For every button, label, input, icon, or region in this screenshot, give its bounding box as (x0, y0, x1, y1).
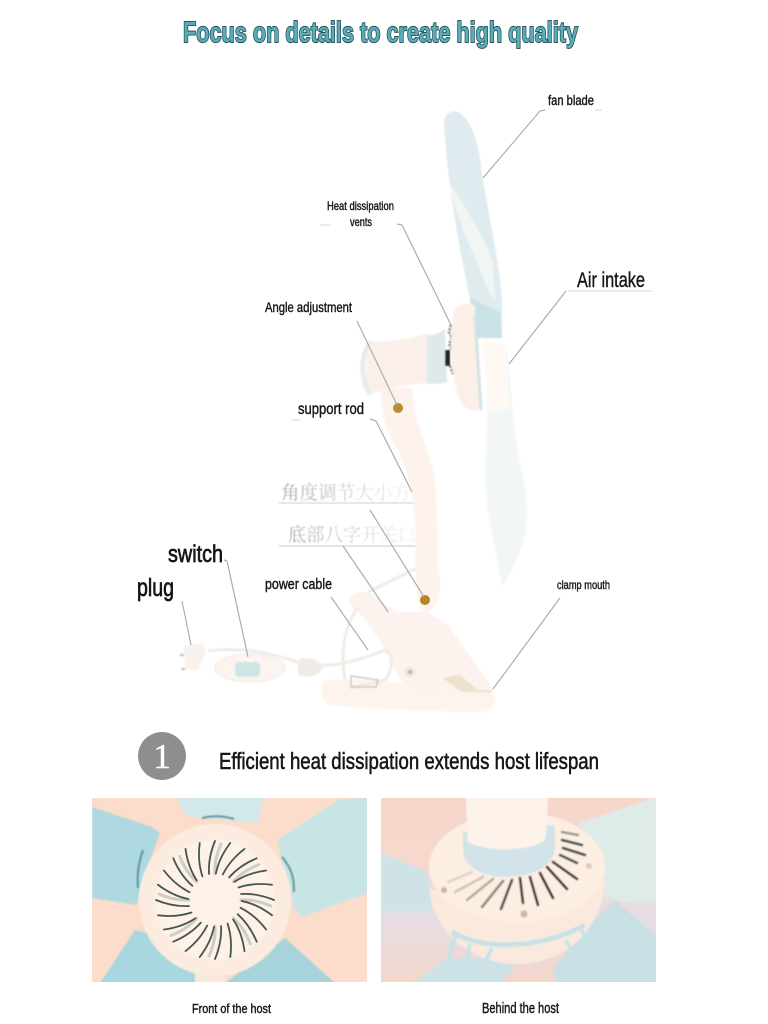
hub top face (429, 816, 606, 890)
label: fan blade (483, 93, 602, 178)
section heading: Efficient heat dissipation extends host lifespan (219, 748, 599, 774)
swirl vents (159, 844, 271, 956)
label: angle adjustment (265, 299, 397, 405)
leader: clamp arm (343, 546, 388, 612)
blue seam (452, 925, 585, 945)
label: plug (137, 574, 191, 645)
hub side wall (430, 880, 605, 964)
infographic canvas (92, 20, 656, 1014)
white lower blade root (482, 338, 509, 410)
black gap (445, 350, 450, 366)
clamp jaw pad (442, 675, 492, 692)
housing end cap (360, 340, 372, 396)
stem (195, 974, 225, 982)
leader: rod lower joint (370, 510, 424, 597)
top blade (177, 797, 263, 823)
label: air intake: Air intake (577, 269, 645, 292)
lower left blade (100, 930, 195, 983)
label: fan blade: fan blade (548, 93, 594, 108)
lower right blade (552, 900, 657, 983)
clamp arm (349, 592, 494, 698)
switch button (235, 662, 260, 677)
support rod (380, 388, 440, 612)
lower fan blade (484, 340, 527, 587)
lower left blade (412, 958, 520, 983)
title: Focus on details to create high quality (183, 17, 578, 49)
photo: front of the host (92, 797, 368, 983)
photo background (381, 798, 656, 982)
label: support rod: support rod (298, 401, 364, 418)
label: heat dissipation vents (320, 199, 451, 325)
vent ridges (449, 325, 453, 374)
label: clamp mouth (493, 578, 610, 689)
plug (184, 643, 206, 670)
left blade (92, 807, 160, 905)
photo background (92, 798, 367, 982)
hub rim (475, 314, 481, 410)
cable knot (298, 658, 323, 677)
right blade (277, 797, 368, 917)
label: air intake (509, 269, 652, 364)
caption: behind the host: Behind the host (482, 1001, 559, 1017)
label: power cable (265, 577, 368, 650)
left blade (381, 853, 432, 912)
label: heat dissipation vents: vents (350, 215, 372, 229)
number badge (138, 732, 186, 780)
label: heat dissipation vents: Heat dissipation (327, 199, 394, 213)
power cable (208, 568, 417, 688)
label: switch (168, 541, 248, 657)
collar (463, 825, 555, 877)
label: switch: switch (168, 541, 223, 568)
ghost caption text behind stand (279, 478, 417, 547)
brass screw: clamp joint (420, 595, 430, 605)
switch body (215, 654, 285, 682)
label: angle adjustment: Angle adjustment (265, 299, 352, 315)
number badge: 1 (153, 737, 171, 776)
photo: behind the host (381, 797, 657, 983)
lower right blade (225, 938, 335, 983)
brass screw: angle joint (393, 403, 403, 413)
clamp pivot (404, 666, 416, 678)
label: plug: plug (137, 574, 174, 602)
upper fan blade (444, 111, 502, 338)
hub face (155, 840, 275, 960)
hub disc (451, 304, 481, 410)
label: clamp mouth: clamp mouth (557, 578, 610, 592)
label: support rod (292, 401, 412, 492)
ghost caption text behind stand: 底部八字开关口 (288, 520, 416, 547)
rear vents (448, 832, 585, 909)
blade root (470, 298, 502, 338)
fan product illustration (180, 111, 527, 712)
hub outer ring (139, 824, 291, 976)
caption: front of the host: Front of the host (192, 1001, 271, 1016)
dark swirl slots (156, 841, 274, 959)
screw holes (441, 887, 447, 893)
blade mounting tabs (446, 929, 586, 961)
label: power cable: power cable (265, 577, 332, 593)
motor housing (366, 333, 428, 395)
top right blade (578, 797, 656, 903)
thin blade edge (450, 186, 495, 300)
cable holder (351, 676, 378, 687)
clamp base (321, 679, 495, 712)
neck (466, 797, 548, 849)
plug pins (180, 655, 185, 669)
hub dark seams (138, 816, 294, 892)
ghost caption text behind stand: 角度调节大小方 (281, 478, 411, 505)
collar (427, 329, 447, 384)
